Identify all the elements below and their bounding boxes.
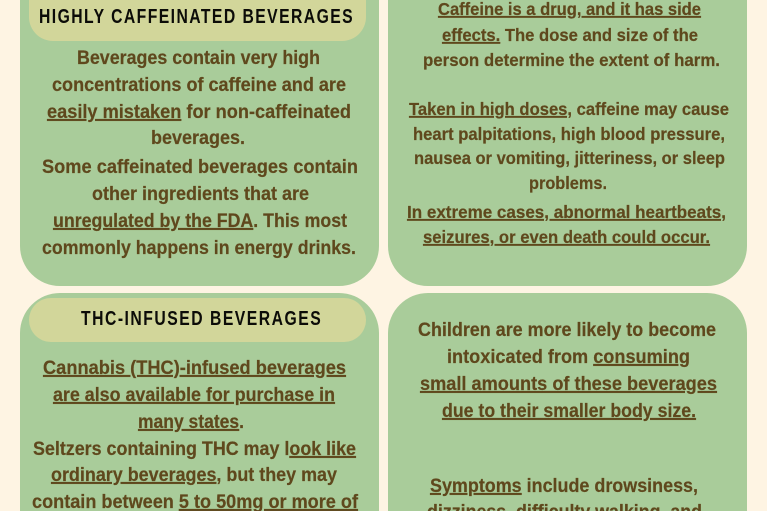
panel: THC-infused beverages: [20, 293, 379, 511]
text block: effects on children: intoxicated from consuming: [447, 346, 690, 368]
text block: caffeine side effects: problems.: [529, 173, 607, 193]
heading: THC-infused beverages: [29, 298, 366, 342]
text block: caffeine side effects: In extreme cases, abnormal heartbeats,: [407, 202, 726, 222]
text block: caffeinated beverage description: easily mistaken for non-caffeinated: [47, 101, 351, 123]
text block: caffeinated beverage description: other ingredients that are: [92, 183, 309, 205]
text block: effects on children: Symptoms include drowsiness,: [430, 475, 698, 497]
text block: caffeine side effects: Taken in high doses, caffeine may cause: [409, 99, 729, 119]
heading: highly caffeinated beverages: HIGHLY CAFFEINATED BEVERAGES: [39, 4, 353, 28]
text block: caffeine side effects: [407, 0, 729, 247]
text block: effects on children: due to their smaller body size.: [442, 400, 696, 422]
text block: THC beverage description: are also available for purchase in: [53, 384, 335, 406]
panel: effects on children: [388, 293, 747, 511]
heading: THC-infused beverages: THC-INFUSED BEVERAGES: [81, 306, 321, 330]
text block: caffeinated beverage description: [42, 47, 358, 259]
panel: caffeine side effects: [388, 0, 747, 286]
text block: THC beverage description: Cannabis (THC)-infused beverages: [43, 357, 346, 379]
text block: caffeinated beverage description: commonly happens in energy drinks.: [42, 237, 356, 259]
panel: highly caffeinated beverages: [20, 0, 379, 286]
text block: effects on children: [418, 319, 717, 511]
text block: caffeinated beverage description: unregulated by the FDA. This most: [53, 210, 347, 232]
text block: caffeine side effects: person determine the extent of harm.: [423, 50, 720, 70]
text block: caffeine side effects: effects. The dose and size of the: [442, 25, 698, 45]
text block: caffeinated beverage description: concentrations of caffeine and are: [52, 74, 346, 96]
text block: THC beverage description: many states.: [138, 411, 244, 433]
text block: THC beverage description: [32, 357, 358, 511]
text block: caffeine side effects: nausea or vomiting, jitteriness, or sleep: [414, 148, 725, 168]
text block: caffeine side effects: heart palpitations, high blood pressure,: [413, 124, 725, 144]
text block: caffeinated beverage description: Beverages contain very high: [77, 47, 320, 69]
text block: effects on children: small amounts of these beverages: [420, 373, 717, 395]
text block: THC beverage description: Seltzers containing THC may look like: [33, 438, 356, 460]
heading: highly caffeinated beverages: [29, 0, 366, 41]
text block: caffeinated beverage description: Some caffeinated beverages contain: [42, 156, 358, 178]
text block: effects on children: Children are more likely to become: [418, 319, 716, 341]
text block: THC beverage description: ordinary beverages, but they may: [51, 464, 337, 486]
text block: caffeinated beverage description: beverages.: [151, 127, 245, 149]
text block: caffeine side effects: seizures, or even death could occur.: [423, 227, 710, 247]
